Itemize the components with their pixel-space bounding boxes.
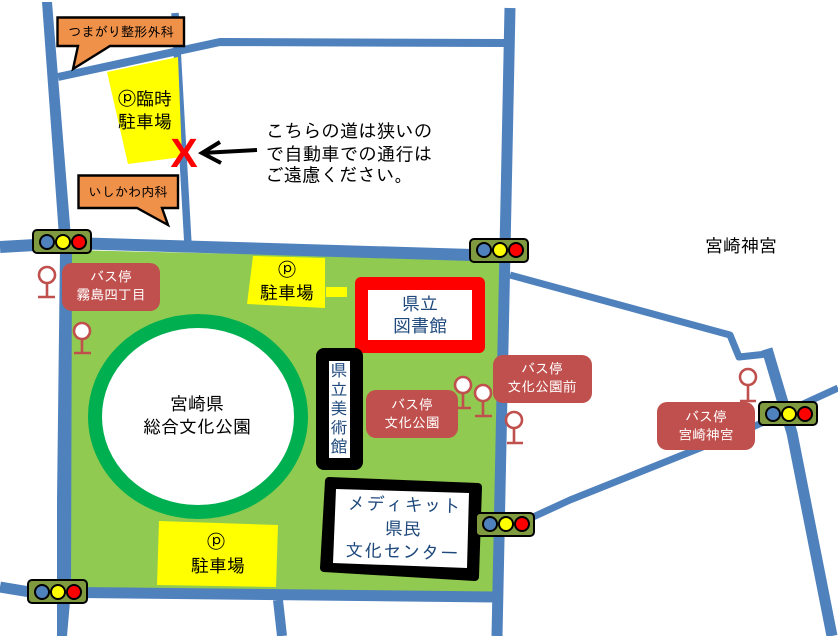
museum: 美 <box>330 400 348 418</box>
culture center: 文化センター <box>345 540 460 564</box>
road notice: ご遠慮ください。 <box>265 164 413 186</box>
parking: south: 駐車場 <box>191 556 245 576</box>
bus label: miyazaki jingu: 宮崎神宮 <box>678 428 734 442</box>
traffic light: northeast <box>470 239 528 262</box>
bus label: bunka koen <box>366 390 458 438</box>
bus label: kirishima 4-chome <box>62 263 160 311</box>
stadium ring and park name: 宮崎県 <box>170 394 224 414</box>
bus stop icon: shrine <box>740 369 756 401</box>
museum: 術 <box>330 418 348 438</box>
library: 図書館 <box>393 316 447 336</box>
stadium ring and park name <box>95 321 301 512</box>
temporary parking: ⓟ臨時 <box>118 89 172 109</box>
road closure mark: X <box>170 130 198 176</box>
bus label: miyazaki jingu <box>657 402 755 450</box>
bus label: bunka koen mae: バス停 <box>521 362 563 376</box>
bus stop icon: bunka koen <box>455 377 471 408</box>
road notice: こちらの道は狭いの <box>266 120 432 142</box>
culture center <box>324 481 478 577</box>
callout: clinic ishikawa <box>78 176 178 225</box>
bus stop icon: kirishima north <box>38 267 55 297</box>
arrow <box>202 142 257 163</box>
bus label: bunka koen mae <box>493 355 592 403</box>
bus label: kirishima 4-chome: バス停 <box>90 270 132 284</box>
temporary parking: 駐車場 <box>118 112 172 132</box>
traffic light: shrine <box>759 402 817 425</box>
traffic light: east <box>476 513 534 536</box>
road notice: で自動車での通行は <box>266 144 432 164</box>
bus label: miyazaki jingu: バス停 <box>685 410 727 424</box>
parking: north <box>247 256 347 308</box>
callout: clinic ishikawa: いしかわ内科 <box>88 184 168 200</box>
temporary parking <box>107 57 182 164</box>
parking: south <box>157 521 278 587</box>
stadium ring and park name: 総合文化公園 <box>143 417 251 437</box>
parking: north: ⓟ <box>278 260 296 280</box>
bus stop icon: kirishima south <box>74 323 91 353</box>
culture center: メディキット <box>347 493 462 517</box>
bus label: bunka koen: 文化公園 <box>384 416 440 430</box>
park ground <box>69 250 503 593</box>
parking: north: 駐車場 <box>260 283 314 303</box>
culture center: 県民 <box>385 518 421 540</box>
parking: south: ⓟ <box>207 532 225 552</box>
callout: clinic tsumagari: つまがり整形外科 <box>68 24 174 40</box>
museum: 立 <box>330 380 348 400</box>
bus label: kirishima 4-chome: 霧島四丁目 <box>77 288 145 302</box>
traffic light: northwest <box>33 230 91 253</box>
road notice <box>265 120 432 186</box>
bus stop icon: bunka koen mae <box>475 385 492 416</box>
bus stop icon: east road <box>506 412 523 443</box>
bus label: bunka koen: バス停 <box>391 398 433 412</box>
library <box>355 277 485 353</box>
bus label: bunka koen mae: 文化公園前 <box>508 380 577 394</box>
museum: 館 <box>330 438 348 456</box>
library: 県立 <box>402 294 438 314</box>
traffic light: southwest <box>28 580 87 603</box>
museum <box>316 348 363 470</box>
callout: clinic tsumagari <box>58 18 184 69</box>
museum: 県 <box>330 362 348 380</box>
place label: miyazaki shrine: 宮崎神宮 <box>705 236 777 256</box>
